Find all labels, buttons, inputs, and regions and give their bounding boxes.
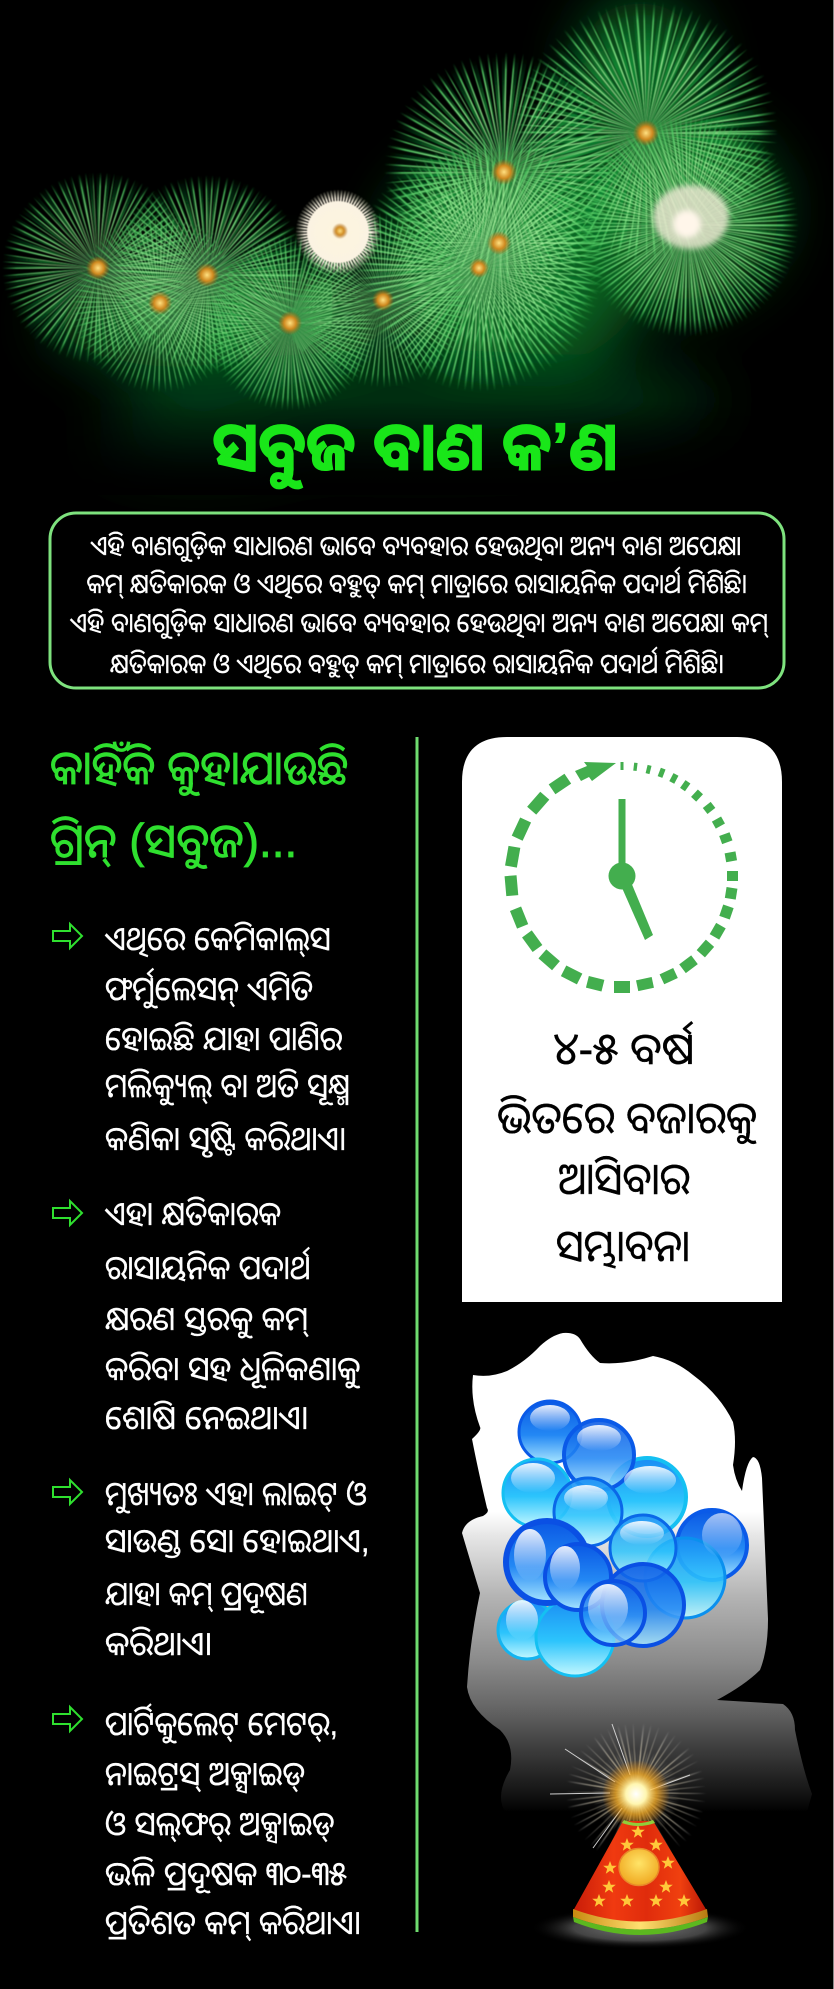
cone stars [592, 1825, 691, 1907]
white burst: right [653, 185, 729, 249]
panel: clock card [462, 737, 782, 1302]
bullet 4 line 4: ଭଳି ପ୍ରଦୂଷକ ୩୦-୩୫ [105, 1855, 348, 1893]
balloon [536, 1598, 614, 1676]
cone green base [573, 1917, 708, 1935]
intro line 1: ଏହି ବାଣଗୁଡ଼ିକ ସାଧାରଣ ଭାବେ ବ୍ୟବହାର ହେଉଥିବା ଅନ୍ୟ ବାଣ ଅପେକ୍ଷା [90, 531, 741, 562]
icon: clock with dashed ring [505, 762, 738, 993]
intro line 2: କମ୍ କ୍ଷତିକାରକ ଓ ଏଥିରେ ବହୁତ୍ କମ୍ ମାତ୍ରାରେ ରାସାୟନିକ ପଦାର୍ଥ ମିଶିଛି। [87, 567, 747, 599]
firecracker cone [573, 1821, 707, 1930]
icon: blue balloon cluster [498, 1401, 747, 1676]
spark core glow [602, 1760, 670, 1828]
arrowhead on ring [575, 762, 616, 781]
bullet 1 [53, 920, 350, 1159]
cone gold band [573, 1909, 708, 1930]
panel: intro text box [50, 513, 784, 688]
balloon [645, 1538, 725, 1618]
arrow icon [53, 1707, 82, 1731]
clock caption line 1: ୪-୫ ବର୍ଷ [554, 1021, 694, 1074]
hour hand [619, 870, 653, 940]
bullet 1 line 5: କଣିକା ସୃଷ୍ଟି କରିଥାଏ। [105, 1120, 346, 1159]
heading line 2: ଗ୍ରିନ୍ (ସବୁଜ)... [50, 814, 297, 869]
burst: lower right [631, 169, 743, 281]
balloon [581, 1581, 645, 1645]
icon: firecracker with spark [530, 1724, 750, 1949]
bullet 2 [53, 1195, 361, 1436]
intro line 3: ଏହି ବାଣଗୁଡ଼ିକ ସାଧାରଣ ଭାବେ ବ୍ୟବହାର ହେଉଥିବା ଅନ୍ୟ ବାଣ ଅପେକ୍ଷା କମ୍ [69, 608, 769, 639]
bullet 4 line 1: ପାର୍ଟିକୁଲେଟ୍ ମେଟର୍, [105, 1703, 338, 1743]
bullet 2 line 5: ଶୋଷି ନେଇଥାଏ। [105, 1400, 309, 1436]
arrow icon [53, 924, 82, 948]
bullet 1 line 4: ମଲିକ୍ୟୁଲ୍ ବା ଅତି ସୂକ୍ଷ୍ମ [105, 1068, 350, 1105]
bullet 4 line 2: ନାଇଟ୍ରସ୍ ଅକ୍ସାଇଡ୍ [105, 1755, 305, 1793]
balloon [503, 1459, 571, 1527]
right edge line [833, 0, 834, 1989]
spark rays [601, 1758, 671, 1828]
green haze behind fireworks [50, 0, 780, 465]
bullet 1 line 2: ଫର୍ମୁଲେସନ୍ ଏମିତି [105, 968, 313, 1008]
bullet 3 line 3: ଯାହା କମ୍ ପ୍ରଦୂଷଣ [105, 1575, 308, 1613]
balloon highlights [506, 1405, 742, 1640]
burst: centre top [444, 112, 564, 232]
smoke cloud shape [462, 1333, 812, 1812]
bullet 2 line 1: ଏହା କ୍ଷତିକାରକ [104, 1195, 281, 1232]
clock hub [608, 862, 636, 890]
spark long rays [550, 1724, 690, 1848]
vertical divider [416, 737, 418, 1932]
balloon [519, 1401, 581, 1463]
firework core glows [86, 120, 659, 335]
cone label oval [619, 1848, 659, 1886]
clock caption line 3: ଆସିବାର [558, 1154, 690, 1203]
balloon [602, 1564, 684, 1646]
balloon [506, 1521, 588, 1603]
bullet 2 line 3: କ୍ଷରଣ ସ୍ତରକୁ କମ୍ [105, 1300, 309, 1338]
white burst: left [307, 201, 369, 263]
bullet 1 line 1: ଏଥିରେ କେମିକାଲ୍‌ସ [104, 920, 331, 957]
arrow icon [53, 1480, 82, 1504]
heading: why called green: କାହିଁକି କୁହାଯାଉଛି [50, 742, 348, 796]
burst: right top [580, 67, 712, 199]
arrow icon [53, 1201, 82, 1225]
balloon [554, 1478, 622, 1546]
bullet 4 [53, 1703, 361, 1941]
burst: lower middle [246, 256, 427, 367]
bullet 3 line 2: ସାଉଣ୍ଡ ସୋ ହୋଇଥାଏ, [105, 1522, 369, 1559]
intro line 4: କ୍ଷତିକାରକ ଓ ଏଥିରେ ବହୁତ୍ କମ୍ ମାତ୍ରାରେ ରାସାୟନିକ ପଦାର୍ଥ ମିଶିଛି। [110, 647, 724, 679]
ring dashes [505, 762, 738, 993]
burst: left middle [115, 225, 257, 348]
bullet 2 line 2: ରାସାୟନିକ ପଦାର୍ଥ [105, 1247, 311, 1286]
minute hand [618, 799, 626, 876]
balloon [498, 1601, 556, 1659]
ground shadow [530, 1907, 750, 1949]
balloon [677, 1510, 747, 1580]
bullet 2 line 4: କରିବା ସହ ଧୂଳିକଣାକୁ [105, 1350, 361, 1388]
clock caption line 4: ସମ୍ଭାବନା [556, 1221, 690, 1270]
bullet 1 line 3: ହୋଇଛି ଯାହା ପାଣିର [105, 1020, 342, 1057]
clock caption line 2: ଭିତରେ ବଜାରକୁ [497, 1094, 757, 1144]
balloon [608, 1458, 686, 1536]
balloon [564, 1420, 634, 1490]
balloon [610, 1515, 676, 1581]
bullet 4 line 3: ଓ ସଲ୍‌ଫର୍ ଅକ୍ସାଇଡ୍ [105, 1805, 335, 1843]
burst: centre lower [417, 187, 555, 330]
burst: far left [50, 220, 146, 316]
balloon [545, 1544, 611, 1610]
bullet 3 line 1: ମୁଖ୍ୟତଃ ଏହା ଲାଇଟ୍ ଓ [105, 1475, 367, 1513]
hero bottom fade [0, 400, 834, 495]
hero: green fireworks photo [0, 0, 834, 495]
bullet 4 line 5: ପ୍ରତିଶତ କମ୍ କରିଥାଏ। [105, 1904, 361, 1941]
heading: why called green [50, 742, 348, 869]
bullet 3 line 4: କରିଥାଏ। [105, 1625, 212, 1662]
bullet 3 [53, 1475, 369, 1662]
title: ସବୁଜ ବାଣ କ’ଣ [212, 409, 618, 490]
cone top ring [622, 1820, 655, 1826]
